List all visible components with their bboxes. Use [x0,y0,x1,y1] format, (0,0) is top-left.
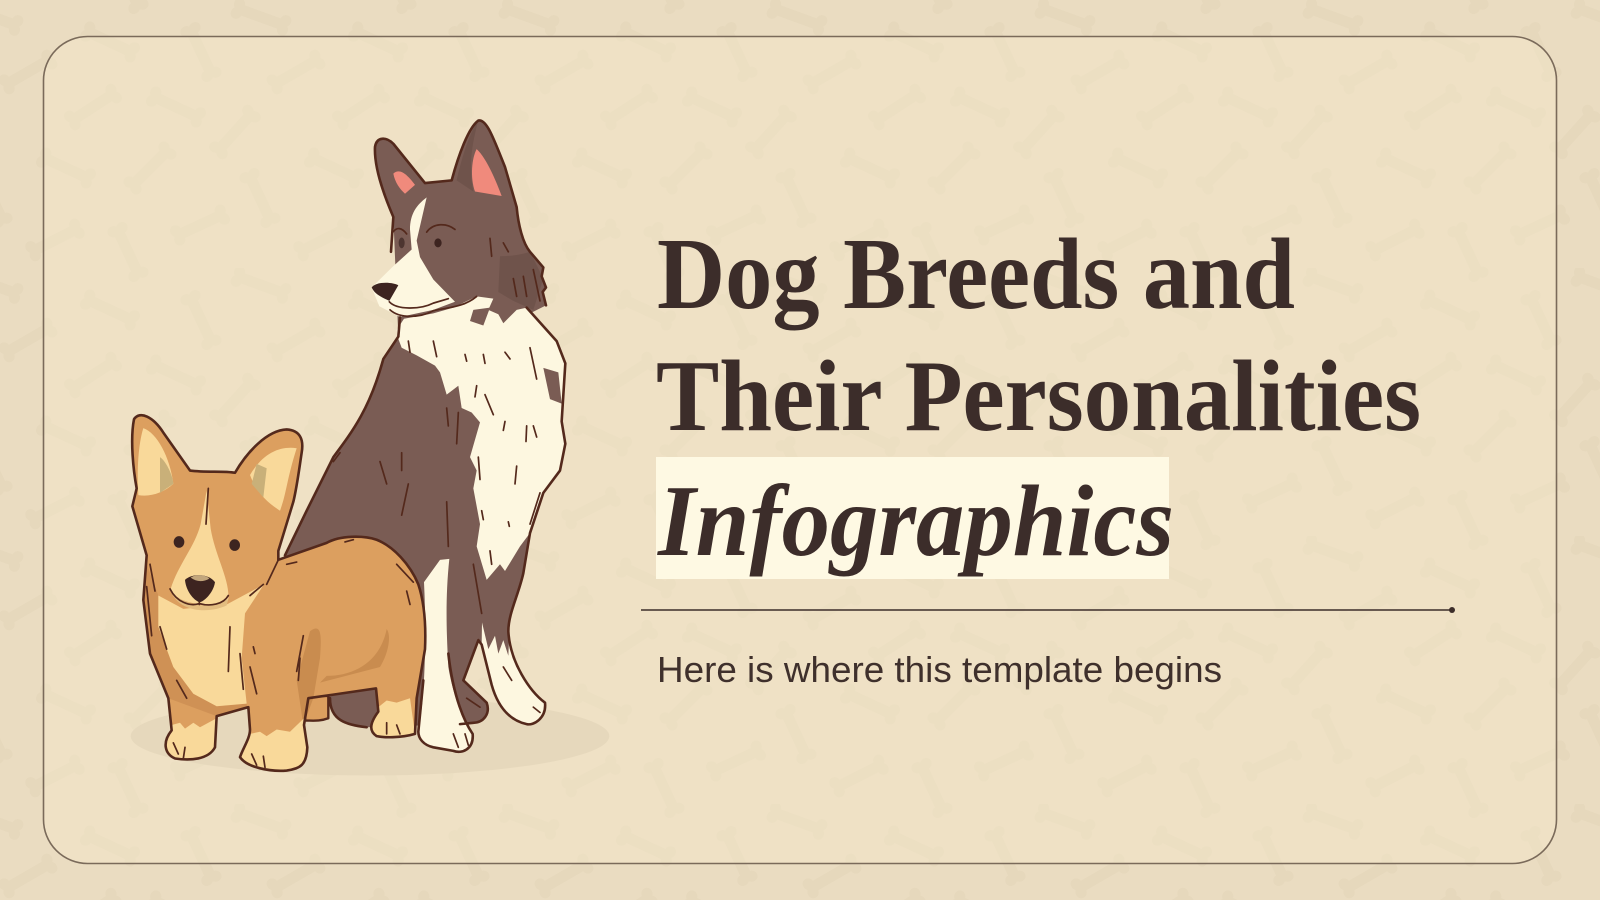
subtitle: Here is where this template begins [657,649,1222,690]
collie right ear inner [472,149,502,196]
title line 2: Their Personalities [656,340,1421,453]
corgi outline [132,415,425,771]
collie nose [372,283,398,301]
illustration: two dogs [131,120,609,775]
corgi fur ticks [147,488,413,767]
highlight box [656,457,1169,579]
collie mouth [389,296,477,316]
corgi ear shade [160,457,267,497]
title line 1: Dog Breeds and [657,218,1295,331]
corgi nose [185,575,215,602]
corgi dog [132,415,425,771]
corgi paw left [166,718,217,759]
collie chest white [397,296,565,580]
collie white back leg [482,622,545,724]
corgi right ear inner [250,448,297,511]
corgi chest cream [158,584,264,706]
ground shadow [131,697,609,775]
corgi left ear inner [138,428,173,496]
collie eyes [393,225,455,248]
collie face white [372,197,455,317]
corgi body fill [132,415,425,771]
corgi paw back [371,698,415,737]
collie white front leg [418,559,473,752]
title line 3: Infographics [657,465,1174,578]
collie fur ticks [333,238,540,747]
collie outline [285,120,565,752]
divider line with dot [641,607,1455,613]
border collie dog [285,120,565,752]
corgi paw front right [240,718,307,771]
title [656,218,1421,579]
collie neck shadow spots [470,308,562,404]
corgi body shade [297,628,389,725]
corgi eyes [174,536,240,551]
collie body fill [285,120,565,727]
collie left ear inner [393,171,415,194]
corgi chin shade [171,591,228,610]
collie ear shading [457,121,543,310]
corgi muzzle cream [171,491,228,604]
far back corgi leg [305,696,328,721]
corgi mouth [170,589,228,605]
corgi side fur shade [143,564,250,729]
